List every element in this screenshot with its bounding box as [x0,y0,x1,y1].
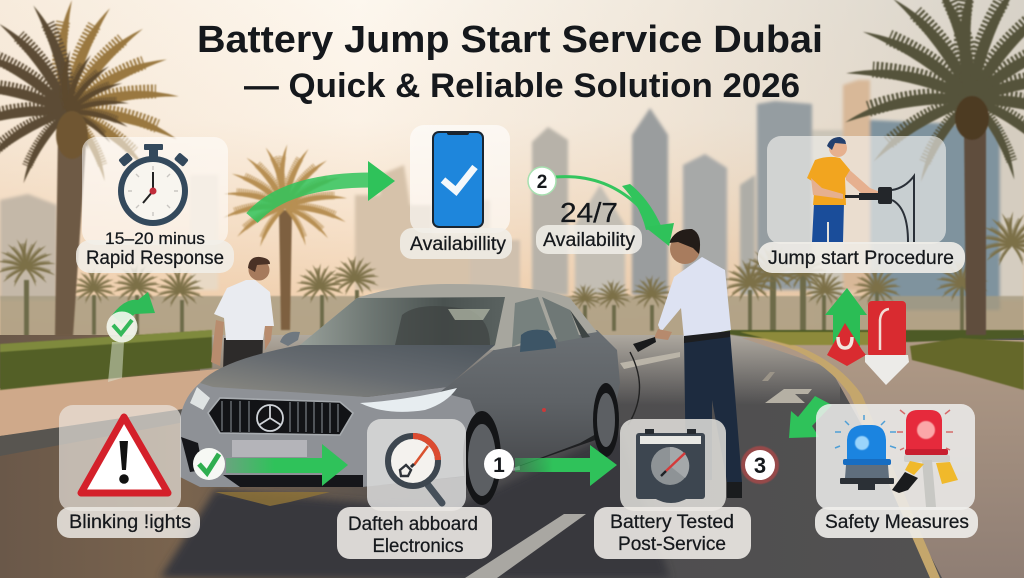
icon: battery gauge [636,429,705,503]
big palm left [0,0,180,336]
label: battery tested post-service [594,507,751,559]
step 1 marker: 1 [493,454,505,477]
arrow: procedure to safety [789,396,832,438]
icons: green up arrow and red connector [825,288,909,385]
title: — Quick & Reliable Solution 2026 [244,67,800,105]
title: Battery Jump Start Service Dubai [197,19,823,61]
label: rapid response: Rapid Response [86,248,224,269]
label: rapid response: 15–20 minus [105,229,205,248]
step 2 with arrow: 2 [537,172,547,193]
icon: red beacon with gloves [892,410,958,507]
icon: smartphone with check [432,131,484,228]
icon: worker with jump cables [807,137,914,242]
check marker on arrow [193,448,225,480]
arrow: response to availability [252,161,395,218]
hedges [0,330,1024,390]
palm centre [222,144,348,330]
label: dafteh abboard electronics: Dafteh abboard [348,514,478,535]
right man with cables [633,229,742,498]
ground and road [0,333,1024,578]
panel: blinking lights [57,405,200,538]
step 2 with arrow [528,167,674,246]
panel: onboard electronics [337,419,492,559]
big palm right [843,0,1024,335]
label: battery tested post-service: Post-Service [618,534,726,555]
label: jump start procedure [758,242,965,273]
car wheels [463,383,619,505]
icon: blue beacon [835,415,896,490]
label: jump start procedure: Jump start Procedure [768,248,954,269]
icon: stopwatch [118,144,189,226]
car grille [208,398,353,435]
arrow: lights to electronics [226,444,348,486]
label: safety measures [815,507,978,538]
step 1 marker [484,449,514,479]
distant palm row [0,211,1024,340]
label: 24/7 availability [536,197,642,254]
panel: jump start procedure [758,136,965,273]
label: availabillity: Availabillity [410,234,507,255]
icon: warning triangle [81,417,168,493]
label: battery tested post-service: Battery Tested [610,512,734,533]
panel: rapid response [76,137,234,273]
label: 24/7 availability: 24/7 [560,197,618,228]
car [180,284,640,505]
label: blinking lights: Blinking !ights [69,512,191,533]
label: 24/7 availability: Availability [543,230,636,251]
label: dafteh abboard electronics: Electronics [372,536,464,557]
panel: battery tested [594,419,751,559]
left man standing [211,257,274,372]
step 3 marker [741,446,779,484]
label: blinking lights [57,507,200,538]
panel: availability phone [400,125,512,259]
label: safety measures: Safety Measures [825,512,969,533]
arrow: electronics to battery [515,445,617,486]
car badge [257,405,283,431]
step 3 marker: 3 [754,453,766,478]
title [197,19,823,105]
label: rapid response [76,229,234,273]
left green arrow with check [106,292,155,382]
icon: magnifying gauge [388,436,442,503]
panel: safety measures [815,404,978,538]
label: dafteh abboard electronics [337,507,492,559]
